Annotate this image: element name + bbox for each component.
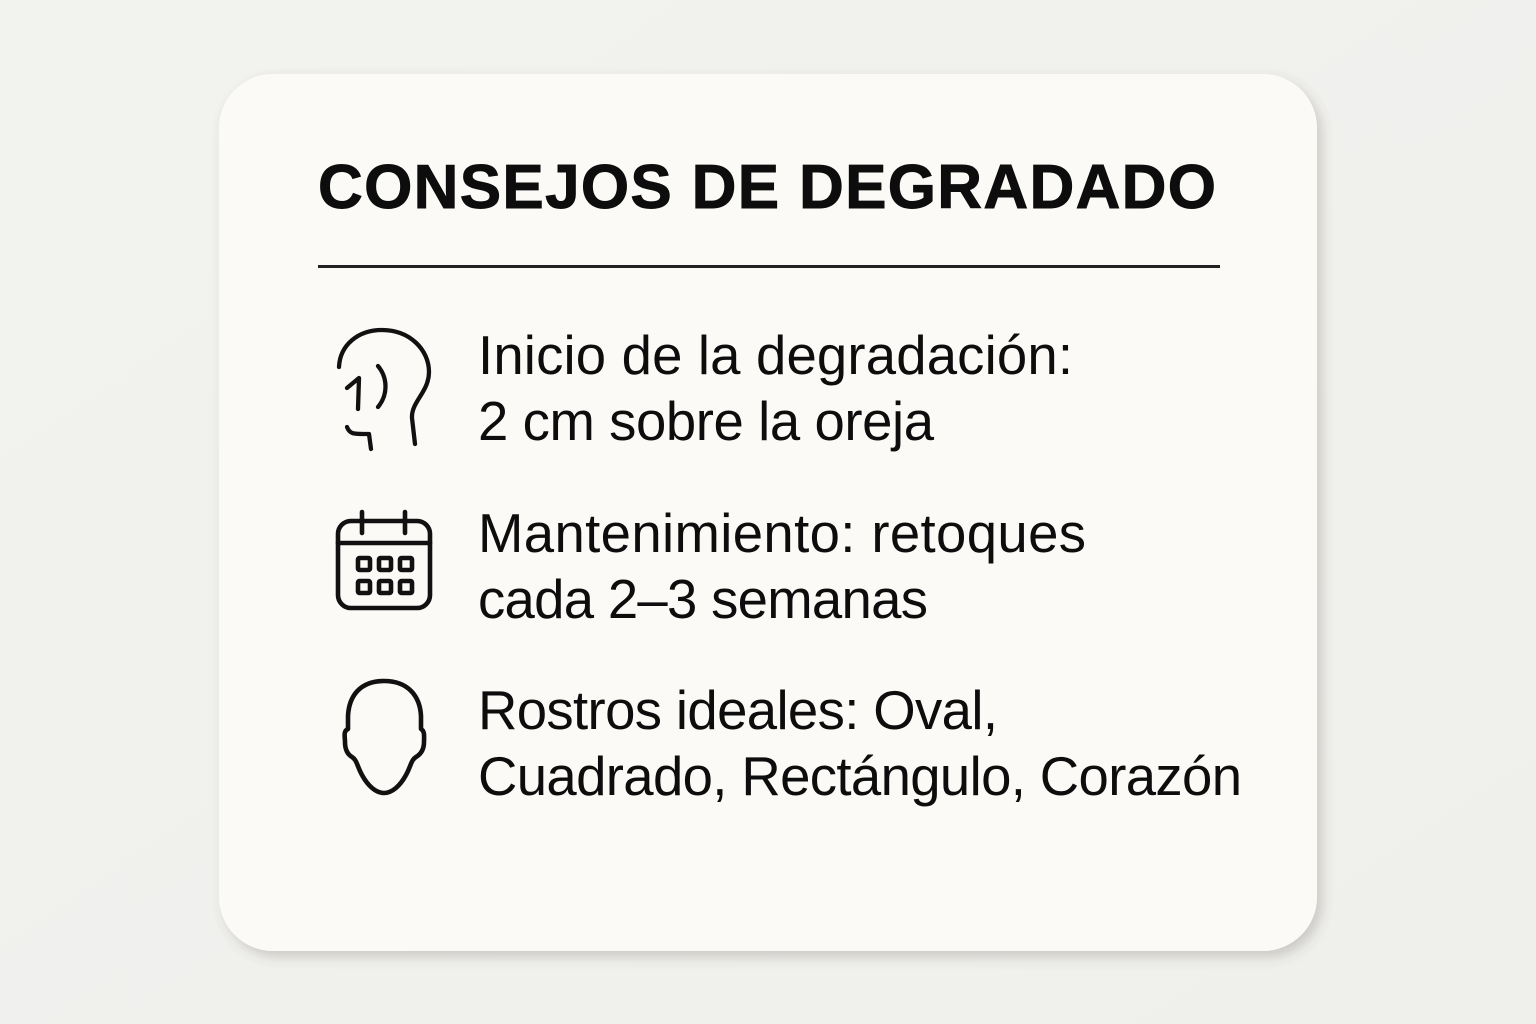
panel: card bbox=[219, 74, 1317, 951]
divider bbox=[318, 265, 1220, 268]
text: maintenance: Mantenimiento: retoques bbox=[478, 503, 1086, 564]
icon: face outline bbox=[345, 681, 424, 793]
text: ideal faces: Rostros ideales: Oval, bbox=[478, 680, 998, 741]
text: ideal faces bbox=[478, 680, 1242, 807]
text: fade start: Inicio de la degradación: bbox=[478, 325, 1073, 386]
text: maintenance bbox=[478, 503, 1086, 630]
title: CONSEJOS DE DEGRADADO bbox=[318, 153, 1216, 222]
text: fade start bbox=[478, 325, 1073, 452]
icon: head profile bbox=[339, 330, 429, 449]
text: fade start: 2 cm sobre la oreja bbox=[478, 391, 935, 452]
icon: calendar bbox=[338, 512, 430, 608]
text: ideal faces: Cuadrado, Rectángulo, Corazón bbox=[478, 746, 1242, 807]
text: maintenance: cada 2–3 semanas bbox=[478, 569, 928, 630]
